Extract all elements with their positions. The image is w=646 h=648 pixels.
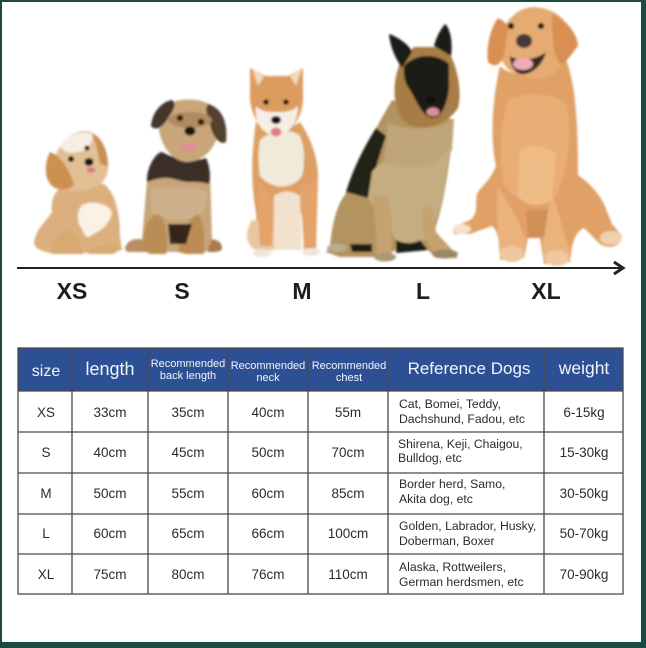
row: XL: 75cm (93, 567, 127, 582)
size table (18, 348, 623, 594)
size labels: XL (531, 278, 561, 304)
table header row: chest (336, 372, 362, 384)
table header row: neck (256, 372, 280, 384)
row: XL: XL (38, 567, 55, 582)
row: L: 66cm (251, 526, 285, 541)
row: M: 60cm (251, 486, 285, 501)
row: L (42, 519, 608, 548)
table header row: Recommended (151, 358, 225, 370)
row: XS: Cat, Bomei, Teddy, (399, 397, 501, 411)
icon: M dog (247, 68, 320, 257)
row: XL: Alaska, Rottweilers, (399, 560, 506, 574)
row: XS: 40cm (251, 405, 285, 420)
icon: XL dog (453, 7, 622, 266)
table header row: Recommended (312, 360, 386, 372)
row: XL: 70-90kg (560, 567, 608, 582)
row: XS: 35cm (171, 405, 205, 420)
row: S: 40cm (93, 445, 127, 460)
row: XS (37, 397, 605, 426)
size axis arrow (17, 262, 623, 274)
row: S: 15-30kg (560, 445, 608, 460)
row: XS: Dachshund, Fadou, etc (399, 412, 525, 426)
row: S: S (41, 445, 51, 460)
row: L: 65cm (171, 526, 205, 541)
row: M: M (40, 486, 52, 501)
row: XL: 80cm (171, 567, 205, 582)
row: XS: 6-15kg (563, 405, 605, 420)
table header row: weight (558, 358, 609, 378)
row: XL (38, 560, 608, 589)
row: L: Golden, Labrador, Husky, (399, 519, 536, 533)
row: S: 45cm (171, 445, 205, 460)
icon: S dog (125, 100, 226, 254)
table header row: Reference Dogs (408, 359, 530, 378)
row: S (41, 437, 608, 465)
size labels (57, 278, 561, 304)
row: M: 55cm (171, 486, 205, 501)
row: L: 50-70kg (560, 526, 608, 541)
icon: L dog (326, 24, 460, 262)
row: S: 50cm (251, 445, 285, 460)
row: XS: 33cm (93, 405, 127, 420)
table header row: size (32, 363, 60, 380)
row: M: Akita dog, etc (399, 492, 473, 506)
table header row: length (85, 359, 135, 379)
row: M: 50cm (93, 486, 127, 501)
row: XL: German herdsmen, etc (399, 575, 524, 589)
row: S: Shirena, Keji, Chaigou, (398, 437, 523, 451)
size labels: L (416, 278, 430, 304)
row: XS: 55m (335, 405, 361, 420)
icon: XS dog (34, 131, 122, 254)
row: L: Doberman, Boxer (399, 534, 495, 548)
size labels: S (174, 278, 190, 304)
row: M: 30-50kg (560, 486, 608, 501)
row: XS: XS (37, 405, 55, 420)
row: S: Bulldog, etc (398, 451, 462, 465)
table header row: back length (160, 370, 216, 382)
row: M (40, 477, 608, 506)
size labels: XS (57, 278, 87, 304)
row: L: 60cm (93, 526, 127, 541)
row: S: 70cm (331, 445, 365, 460)
row: XL: 110cm (328, 567, 368, 582)
row: XL: 76cm (251, 567, 285, 582)
table header row: Recommended (231, 360, 305, 372)
row: M: Border herd, Samo, (399, 477, 505, 491)
row: M: 85cm (331, 486, 365, 501)
table header row (18, 348, 623, 391)
row: L: 100cm (328, 526, 368, 541)
row: L: L (42, 526, 50, 541)
size labels: M (292, 278, 312, 304)
